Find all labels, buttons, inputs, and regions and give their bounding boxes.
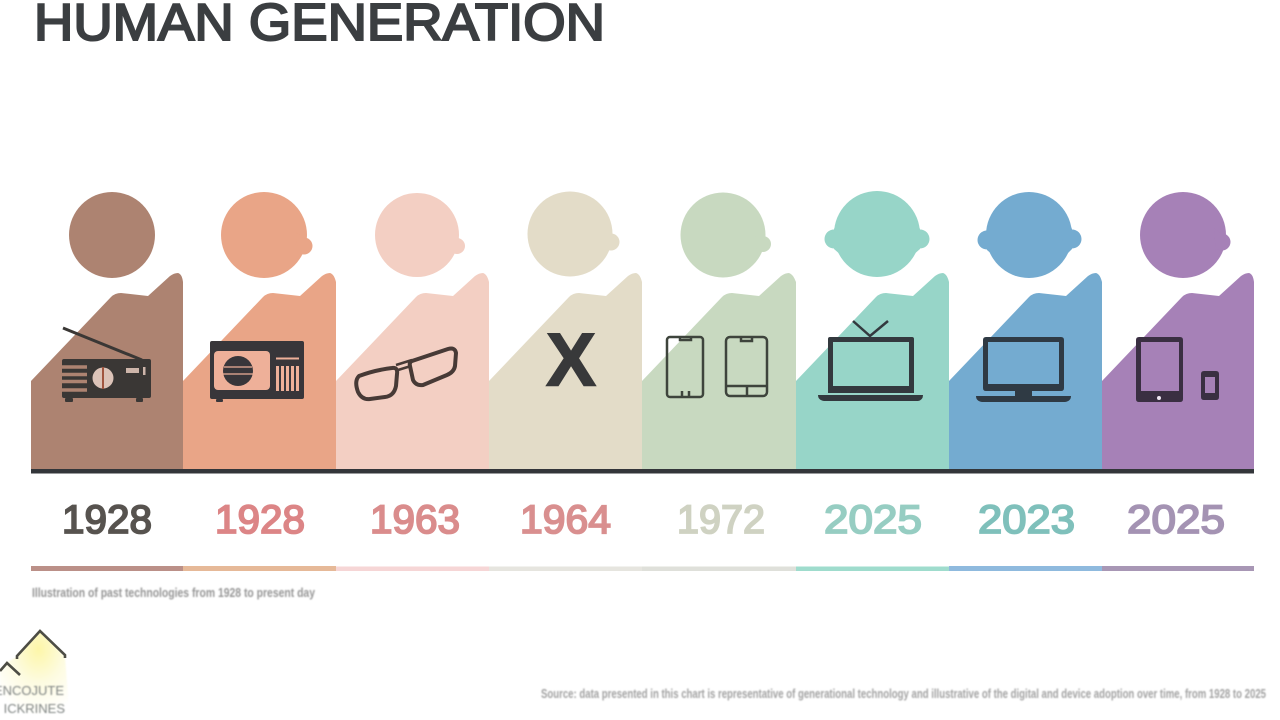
icon: boxed set xyxy=(210,341,304,402)
year 1: 1928 xyxy=(62,498,152,542)
year 4: 1964 xyxy=(520,498,611,542)
year 5: 1972 xyxy=(677,498,765,542)
head 8 xyxy=(1140,192,1230,278)
head 4 xyxy=(528,192,620,276)
panel: figure 3 glasses 1963 xyxy=(336,193,489,469)
icon: glasses xyxy=(356,348,456,399)
body 5 xyxy=(642,273,796,469)
icon: laptop xyxy=(976,337,1071,402)
year 7: 2023 xyxy=(978,498,1075,542)
icon: tablet and phone xyxy=(1136,337,1219,402)
body 2 xyxy=(183,273,336,469)
panel: figure 1 radio 1928 xyxy=(31,192,183,469)
icon: TV with antenna xyxy=(818,321,923,401)
head 5 xyxy=(680,192,771,278)
panel: figure 5 phones 1972 xyxy=(642,192,796,469)
year 2: 1928 xyxy=(215,498,305,542)
body 4 xyxy=(489,273,642,469)
caption: Illustration of past technologies from 1928 to present day xyxy=(32,585,316,600)
year 3: 1963 xyxy=(370,498,460,542)
head 7 xyxy=(978,192,1082,278)
colour legend bar xyxy=(31,566,1254,571)
year 8: 2025 xyxy=(1127,498,1225,542)
logo: ICKRINES xyxy=(4,701,65,716)
head 1 xyxy=(69,192,155,278)
panel: figure 4 X 1964 xyxy=(489,192,642,469)
body 7 xyxy=(949,273,1102,469)
body 8 xyxy=(1102,273,1254,469)
logo xyxy=(0,631,70,720)
head 3 xyxy=(375,193,465,277)
body 3 xyxy=(336,273,489,469)
icon: two phones xyxy=(667,337,767,397)
panel: figure 6 TV 2025 xyxy=(796,191,949,469)
body 1 xyxy=(31,273,183,469)
icon: X letter: X xyxy=(546,318,596,402)
icon: portable radio xyxy=(62,328,151,402)
panel: figure 2 television set 1928 xyxy=(183,192,336,469)
timeline baseline xyxy=(31,469,1254,474)
body 6 xyxy=(796,273,949,469)
panel: figure 7 laptop 2023 xyxy=(949,192,1102,469)
head 6 xyxy=(824,191,930,277)
year 6: 2025 xyxy=(824,498,922,542)
panel: figure 8 tablet 2025 xyxy=(1102,192,1254,469)
year labels xyxy=(62,498,1225,542)
head 2 xyxy=(221,192,312,278)
